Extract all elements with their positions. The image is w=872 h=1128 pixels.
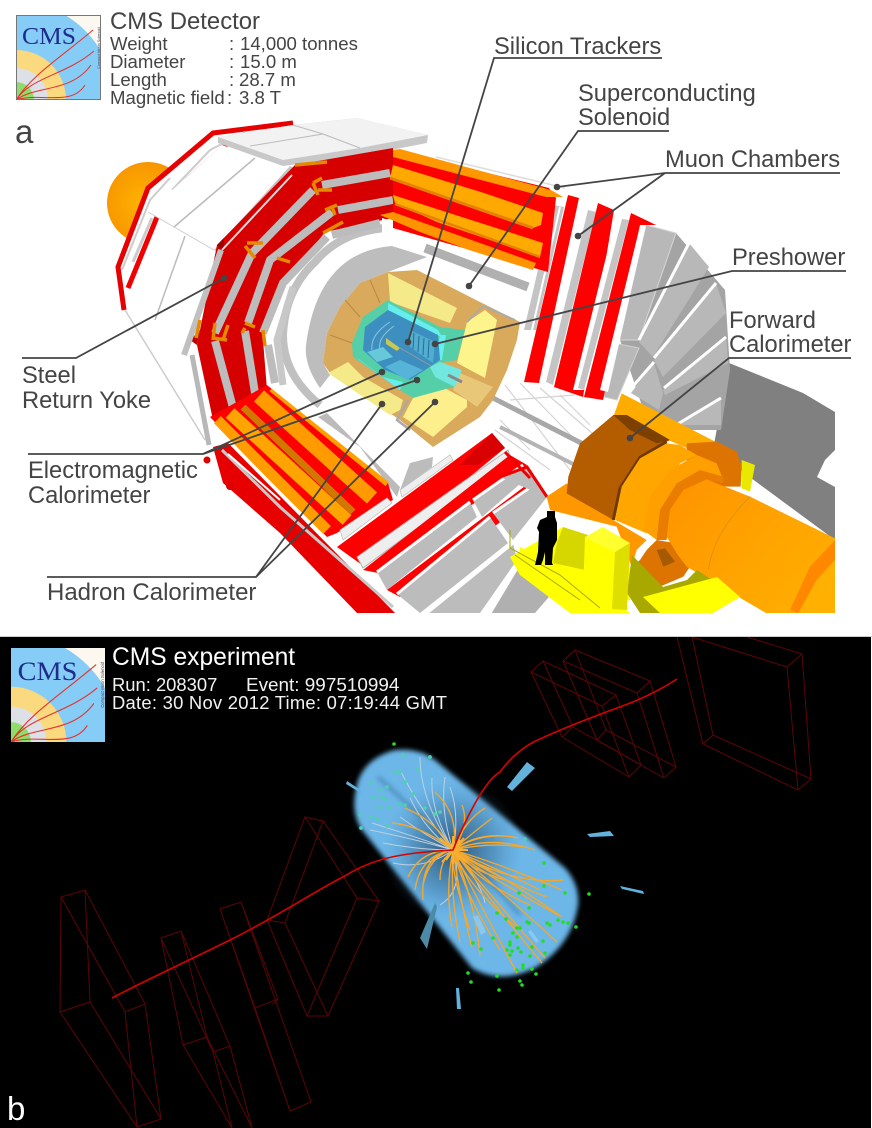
- leader: Hadron Calorimeter: [47, 399, 438, 606]
- panel a: CMS detector cutaway: [0, 2, 852, 613]
- leader: Hadron Calorimeter: Hadron Calorimeter: [47, 579, 256, 606]
- detector capsule volume: [354, 750, 578, 976]
- leader: Steel Return Yoke: Steel: [22, 363, 76, 389]
- leader: Electromagnetic Calorimeter: [28, 369, 420, 509]
- detector specifications: 14,000 tonnes: [240, 33, 358, 54]
- white block under rows: [382, 218, 387, 232]
- detector specifications: :: [229, 51, 234, 72]
- leader: Silicon Trackers: Silicon Trackers: [494, 34, 661, 60]
- detector specifications: [110, 8, 358, 108]
- leader: Preshower: [432, 245, 846, 347]
- preshower and forward cyan cylinder: [430, 362, 462, 387]
- white cage and beam pipes: [492, 382, 592, 470]
- CMS logo: CMS: [22, 24, 76, 50]
- lower red yoke base: [204, 443, 395, 613]
- panel letter a: a: [15, 113, 34, 150]
- CMS logo: Compact Muon Solenoid: [100, 661, 105, 708]
- gray ring behind yoke: [283, 228, 385, 405]
- muon chamber fragments, blue: [346, 762, 644, 1009]
- leader: Superconducting Solenoid: Solenoid: [578, 105, 670, 131]
- leader: Steel Return Yoke: Return Yoke: [22, 388, 151, 414]
- leader: Forward Calorimeter: Calorimeter: [729, 332, 852, 358]
- calorimeter hits, green: [394, 744, 589, 990]
- detector specifications: Length: [110, 69, 167, 90]
- upper orange muon rows: [380, 149, 565, 287]
- event information text: [112, 644, 447, 713]
- detector specifications: :: [229, 33, 234, 54]
- leader: Forward Calorimeter: [627, 308, 852, 441]
- leader: Electromagnetic Calorimeter: Calorimeter: [28, 483, 151, 509]
- lower right end cap panels: [337, 433, 555, 613]
- panel b: collision event display: [0, 634, 872, 1128]
- leader: Silicon Trackers: [405, 34, 662, 345]
- leader: Superconducting Solenoid: [466, 81, 756, 289]
- leader: Superconducting Solenoid: Superconducting: [578, 81, 756, 107]
- event information text: Event: 997510994: [246, 675, 399, 696]
- leader: Preshower: Preshower: [732, 245, 845, 271]
- CMS logo: [16, 15, 101, 100]
- event information text: Run: 208307: [112, 674, 217, 695]
- CMS logo: Compact Muon Solenoid: [97, 27, 101, 69]
- detector specifications: CMS Detector: [110, 8, 260, 35]
- calorimeter hits, teal: [360, 755, 525, 839]
- hadronic tracks, orange: [392, 792, 563, 973]
- detector specifications: :: [227, 87, 232, 108]
- detector specifications: Diameter: [110, 51, 185, 72]
- shadow on ground: [713, 363, 835, 540]
- top white plates: [218, 118, 428, 166]
- CMS logo: CMS: [18, 656, 77, 686]
- yellow support deck behind magnet: [510, 527, 630, 613]
- muon chamber wireframes: [60, 637, 811, 1128]
- lower orange muon rows: [210, 385, 393, 537]
- magnet far end: orange dome: [107, 162, 168, 238]
- panel letter b: b: [7, 1090, 25, 1127]
- end cap plates white: [155, 145, 228, 218]
- leader: Steel Return Yoke: [22, 275, 227, 414]
- leader: Forward Calorimeter: Forward: [729, 308, 816, 334]
- forward calorimeter assembly: [547, 393, 835, 613]
- muon tracks, red: [112, 679, 677, 998]
- far end yoke outlines: [118, 123, 293, 440]
- electromagnetic calorimeter, teal: [352, 300, 465, 398]
- return yoke, left wall red: [197, 148, 393, 420]
- faint tracks: [370, 757, 485, 905]
- person for scale: [535, 511, 557, 565]
- barrel and endcap hadron calorimeter, tan: [323, 270, 520, 447]
- detector specifications: 15.0 m: [240, 51, 297, 72]
- event information text: Date: 30 Nov 2012 Time: 07:19:44 GMT: [112, 692, 447, 713]
- leader: Muon Chambers: [554, 147, 840, 239]
- detector drawing: [107, 118, 835, 613]
- detector specifications: Magnetic field: [110, 87, 225, 108]
- detector specifications: Weight: [110, 33, 168, 54]
- detector specifications: :: [229, 69, 234, 90]
- inner gray ring: [306, 246, 427, 388]
- inner bottom gray structure and white block: [318, 413, 433, 497]
- orange brackets on yoke: [196, 162, 343, 346]
- hadron barrel and tracker, blue: [363, 310, 440, 380]
- return yoke red rings, upper right wall: [524, 195, 656, 400]
- fan of muon chamber panels, upper right: [596, 225, 730, 430]
- detector specifications: 3.8 T: [239, 87, 281, 108]
- detector specifications: 28.7 m: [239, 69, 296, 90]
- event information text: CMS experiment: [112, 644, 295, 671]
- gray chamber strips on yoke: [184, 173, 393, 445]
- yellow support platform: [510, 527, 740, 613]
- leader: Electromagnetic Calorimeter: Electromagnetic: [28, 458, 198, 484]
- CMS logo: [11, 648, 105, 742]
- leader: Muon Chambers: Muon Chambers: [665, 147, 840, 173]
